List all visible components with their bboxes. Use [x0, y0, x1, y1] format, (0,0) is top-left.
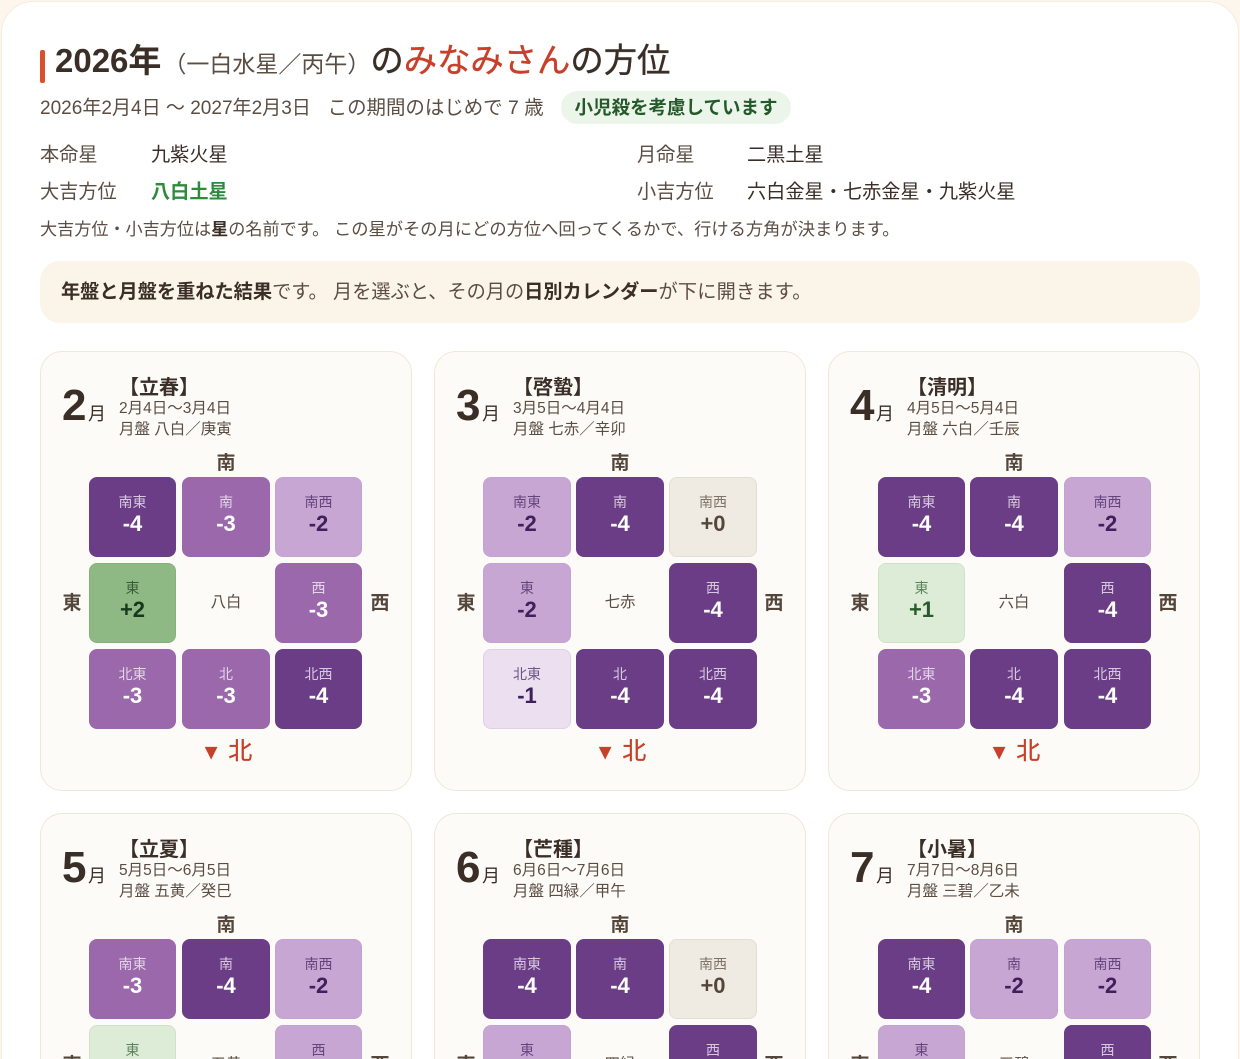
cell NE	[483, 649, 571, 729]
cell SE	[878, 939, 965, 1019]
cell SW	[1064, 477, 1151, 557]
cell S: 南	[219, 956, 233, 972]
south label: 南	[1004, 915, 1024, 936]
cell SE: -4	[912, 973, 931, 998]
cell S	[576, 477, 664, 557]
month: 5月	[62, 843, 106, 892]
cell W: 西	[1100, 580, 1114, 596]
note: 大吉方位・小吉方位は星の名前です。 この星がその月にどの方位へ回ってくるかで、行ける方角が決まります。	[40, 219, 900, 239]
cell SE: -4	[123, 511, 142, 536]
cell W	[275, 1025, 362, 1059]
cell N	[182, 649, 270, 729]
month: 7月	[850, 843, 894, 892]
month: 4月	[850, 381, 894, 430]
center star: 七赤	[605, 594, 635, 611]
dates and month board: 月盤 五黄／癸巳	[119, 883, 232, 900]
dates and month board	[907, 400, 1020, 438]
cell S: -4	[610, 511, 630, 536]
cell W: 西	[706, 580, 720, 596]
cell SW: 南西	[304, 494, 332, 510]
dates and month board	[513, 400, 626, 438]
cell S: -4	[1004, 511, 1024, 536]
cell SE	[483, 477, 571, 557]
info value: 九紫火星: 九紫火星	[151, 145, 228, 166]
cell W	[669, 563, 757, 643]
cell W	[275, 563, 362, 643]
cell SE: 南東	[908, 494, 936, 510]
dates and month board	[907, 862, 1020, 900]
dates and month board: 月盤 八白／庚寅	[119, 421, 232, 438]
cell S: -2	[1004, 973, 1024, 998]
info value: 八白土星: 八白土星	[151, 182, 228, 203]
dates and month board: 月盤 六白／壬辰	[907, 421, 1020, 438]
cell S: 南	[613, 956, 627, 972]
cell E: -2	[517, 597, 537, 622]
cell SE: -2	[517, 511, 537, 536]
solar term: 【清明】	[907, 377, 987, 399]
cell NE	[89, 649, 176, 729]
center star: 六白	[999, 594, 1029, 611]
cell W: -4	[1098, 597, 1117, 622]
cell E: 東	[126, 1042, 140, 1058]
panel: June	[434, 813, 806, 1059]
panel: July	[828, 813, 1200, 1059]
dates and month board: 月盤 三碧／乙未	[907, 883, 1020, 900]
cell SW: -2	[1098, 973, 1117, 998]
cell SW: 南西	[699, 494, 727, 510]
cell NW: -4	[1098, 683, 1117, 708]
cell NE: -1	[517, 683, 537, 708]
title: 2026年（一白水星／丙午）のみなみさんの方位	[55, 42, 670, 80]
cell NW: 北西	[1094, 666, 1122, 682]
cell N: -3	[216, 683, 236, 708]
cell SE: -3	[123, 973, 142, 998]
cell S: 南	[613, 494, 627, 510]
cell SW: -2	[309, 511, 328, 536]
west label: 西	[370, 593, 390, 614]
cell N: 北	[613, 666, 627, 682]
cell N: 北	[219, 666, 233, 682]
dates and month board	[119, 400, 232, 438]
cell N	[970, 649, 1058, 729]
north marker: ▼ 北	[595, 738, 646, 765]
cell E: 東	[520, 580, 534, 596]
cell NE: 北東	[118, 666, 146, 682]
cell NE: 北東	[513, 666, 541, 682]
cell SW: 南西	[1094, 494, 1122, 510]
cell SW: -2	[309, 973, 328, 998]
cell S: -4	[216, 973, 236, 998]
period and age line: 2026年2月4日 〜 2027年2月3日 この期間のはじめで 7 歳	[40, 97, 544, 119]
west label: 西	[764, 593, 784, 614]
cell SE: 南東	[908, 956, 936, 972]
cell NW: -4	[703, 683, 723, 708]
cell E: +1	[909, 597, 934, 622]
cell NE: 北東	[908, 666, 936, 682]
cell W: 西	[1100, 1042, 1114, 1058]
cell SW: +0	[700, 973, 726, 998]
cell NE: -3	[123, 683, 142, 708]
cell NE	[878, 649, 965, 729]
panel: March	[434, 351, 806, 791]
cell S	[182, 477, 270, 557]
cell N: -4	[1004, 683, 1024, 708]
cell S: -3	[216, 511, 236, 536]
cell SW	[275, 939, 362, 1019]
cell S: 南	[219, 494, 233, 510]
dates and month board: 7月7日〜8月6日	[907, 862, 1019, 879]
month: 6月	[456, 843, 500, 892]
solar term: 【芒種】	[513, 839, 593, 861]
dates and month board: 月盤 四緑／甲午	[513, 883, 626, 900]
cell W: -3	[309, 597, 328, 622]
cell SW: +0	[700, 511, 726, 536]
cell E	[878, 563, 965, 643]
dates and month board: 2月4日〜3月4日	[119, 400, 231, 417]
cell NW	[669, 649, 757, 729]
cell E: 東	[126, 580, 140, 596]
cell S: -4	[610, 973, 630, 998]
dates and month board: 4月5日〜5月4日	[907, 400, 1019, 417]
cell W	[669, 1025, 757, 1059]
cell E	[878, 1025, 965, 1059]
cell SW: 南西	[304, 956, 332, 972]
north marker: ▼ 北	[201, 738, 252, 765]
cell SE: 南東	[118, 494, 146, 510]
solar term: 【立夏】	[119, 839, 199, 861]
badge	[561, 91, 791, 124]
panel: April	[828, 351, 1200, 791]
cell NW: -4	[309, 683, 328, 708]
cell W	[1064, 563, 1151, 643]
cell NE: -3	[912, 683, 931, 708]
south label: 南	[216, 915, 236, 936]
cell SW	[275, 477, 362, 557]
cell S	[970, 477, 1058, 557]
cell SE	[878, 477, 965, 557]
panel: May	[40, 813, 412, 1059]
badge: 小児殺を考慮しています	[575, 97, 777, 118]
dates and month board: 3月5日〜4月4日	[513, 400, 625, 417]
south label: 南	[610, 915, 630, 936]
month: 2月	[62, 381, 106, 430]
dates and month board: 5月5日〜6月5日	[119, 862, 231, 879]
solar term: 【啓蟄】	[513, 377, 593, 399]
panel: February	[40, 351, 412, 791]
info: 月命星: 月命星	[637, 145, 695, 166]
cell SE: 南東	[513, 956, 541, 972]
solar term: 【立春】	[119, 377, 199, 399]
cell E	[483, 1025, 571, 1059]
cell SE: -4	[912, 511, 931, 536]
cell E	[89, 563, 176, 643]
cell E	[483, 563, 571, 643]
info: 本命星: 本命星	[40, 145, 98, 166]
cell SE: -4	[517, 973, 537, 998]
cell SW: 南西	[1094, 956, 1122, 972]
info value: 小吉 stars: 六白金星・七赤金星・九紫火星	[747, 182, 1016, 203]
title accent bar	[40, 50, 45, 83]
month: 3月	[456, 381, 500, 430]
cell W: 西	[706, 1042, 720, 1058]
cell N	[576, 649, 664, 729]
east label: 東	[456, 593, 476, 614]
east label: 東	[850, 593, 870, 614]
cell NW: 北西	[699, 666, 727, 682]
dates and month board	[513, 862, 626, 900]
instruction banner: 年盤と月盤を重ねた結果です。 月を選ぶと、その月の日別カレンダーが下に開きます。	[61, 282, 812, 303]
cell SE: 南東	[513, 494, 541, 510]
cell S	[576, 939, 664, 1019]
cell S: 南	[1007, 494, 1021, 510]
west label: 西	[1158, 593, 1178, 614]
south label: 南	[1004, 453, 1024, 474]
east label: 東	[62, 593, 82, 614]
cell S	[970, 939, 1058, 1019]
cell E: 東	[914, 1042, 928, 1058]
cell E: 東	[914, 580, 928, 596]
south label: 南	[216, 453, 236, 474]
info: 大吉方位: 大吉方位	[40, 182, 117, 203]
dates and month board: 6月6日〜7月6日	[513, 862, 625, 879]
dates and month board	[119, 862, 232, 900]
cell N: 北	[1007, 666, 1021, 682]
cell SW: 南西	[699, 956, 727, 972]
cell NW	[1064, 649, 1151, 729]
info: 小吉方位: 小吉方位	[637, 182, 714, 203]
dates and month board: 月盤 七赤／辛卯	[513, 421, 626, 438]
cell W: 西	[312, 580, 326, 596]
cell SW: -2	[1098, 511, 1117, 536]
cell W	[1064, 1025, 1151, 1059]
solar term: 【小暑】	[907, 839, 987, 861]
cell SE	[89, 939, 176, 1019]
cell E: +2	[120, 597, 145, 622]
cell N: -4	[610, 683, 630, 708]
cell NW: 北西	[304, 666, 332, 682]
instruction banner	[40, 261, 1200, 323]
cell NW	[275, 649, 362, 729]
center star: 八白	[211, 594, 241, 611]
cell SE	[89, 477, 176, 557]
cell SW	[669, 477, 757, 557]
cell SW	[1064, 939, 1151, 1019]
cell SW	[669, 939, 757, 1019]
cell E: 東	[520, 1042, 534, 1058]
cell SE: 南東	[118, 956, 146, 972]
info value: 二黒土星: 二黒土星	[747, 145, 824, 166]
cell W: -4	[703, 597, 723, 622]
cell W: 西	[312, 1042, 326, 1058]
cell SE	[483, 939, 571, 1019]
south label: 南	[610, 453, 630, 474]
cell S	[182, 939, 270, 1019]
cell S: 南	[1007, 956, 1021, 972]
north marker: ▼ 北	[989, 738, 1040, 765]
cell E	[89, 1025, 176, 1059]
